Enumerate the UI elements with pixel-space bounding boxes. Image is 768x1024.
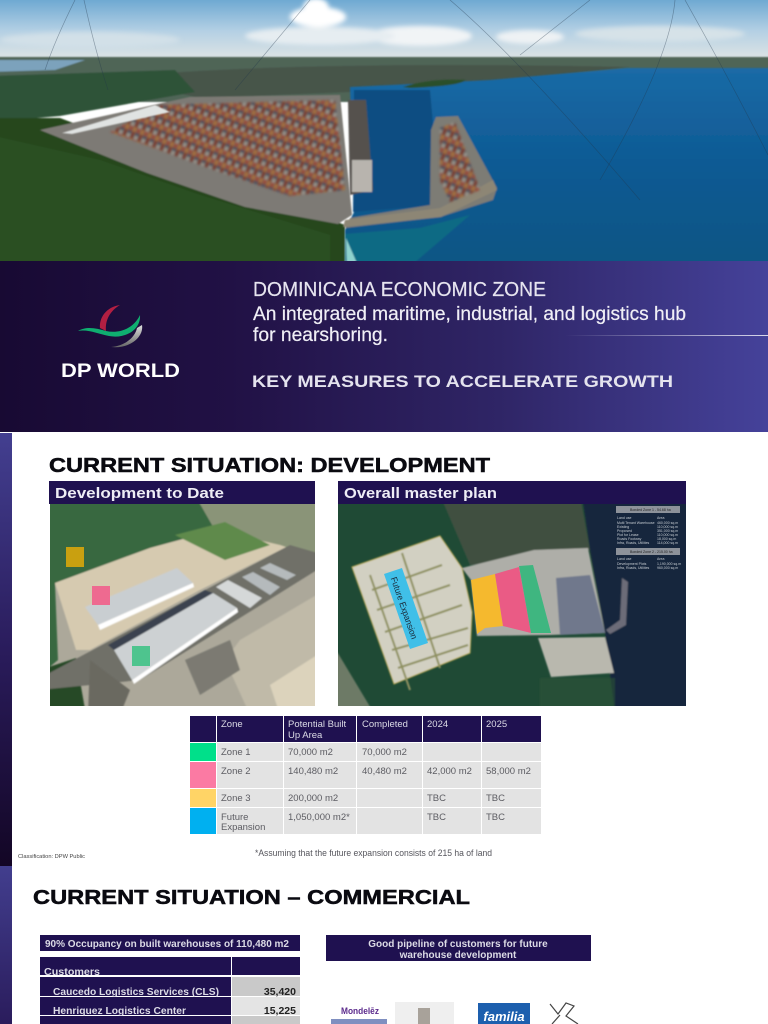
header row	[190, 716, 541, 742]
zone 3 area	[471, 574, 503, 634]
map legend: Area	[657, 516, 664, 520]
header row: 2025	[486, 719, 507, 730]
map legend: Bonded Zone 1 - 54.68 ha	[630, 508, 671, 512]
row: zone 3: 200,000 m2	[288, 793, 338, 804]
hero aerial photo of the port	[0, 0, 768, 275]
header row: 2024	[427, 719, 448, 730]
panel header	[49, 481, 315, 504]
header row: Completed	[362, 719, 408, 730]
heading: current situation commercial: CURRENT SITUATION – COMMERCIAL	[33, 887, 470, 909]
row: future expansion: Future	[221, 812, 248, 823]
row: zone 3: TBC	[486, 793, 505, 804]
row: customers header	[40, 957, 300, 978]
logo: bird nest emblem	[550, 1003, 578, 1024]
banner background	[0, 261, 768, 432]
table: zone build-out schedule	[190, 716, 541, 834]
banner subtitle: An integrated maritime, industrial, and logistics hub	[253, 304, 686, 325]
zone 1 area	[519, 565, 551, 633]
map legend: Existing	[617, 525, 629, 529]
row: zone 3	[190, 789, 541, 807]
map legend: Infra, Roads, Utilities	[617, 541, 650, 545]
row: zone 2: Zone 2	[221, 766, 251, 777]
row: CLS: 35,420	[264, 986, 296, 998]
row: Henriquez: 15,225	[264, 1005, 296, 1017]
logo: Mondelez: Mondelēz	[341, 1006, 379, 1016]
row: zone 1	[190, 743, 541, 761]
row: zone 2: 40,480 m2	[362, 766, 407, 777]
map legend: Roads Footway	[617, 537, 642, 541]
row: zone 3: Zone 3	[221, 793, 251, 804]
row: CLS: Caucedo Logistics Services (CLS)	[53, 986, 219, 998]
panel: pipeline header: warehouse development	[399, 950, 517, 961]
map legend: 114,000 sq.m	[657, 541, 678, 545]
map legend	[616, 506, 681, 570]
master plan map	[338, 504, 686, 706]
map legend: Proposed	[617, 529, 632, 533]
panel: development to date	[49, 481, 315, 706]
marker: zone 3	[66, 547, 84, 567]
map legend: Multi Tenant Warehouse	[617, 521, 655, 525]
row: next customer	[40, 1016, 300, 1024]
map legend: 351,000 sq.m	[657, 529, 678, 533]
map legend: Bonded Zone 2 - 215.00 ha	[630, 550, 673, 554]
logo: DP World	[61, 305, 180, 382]
row: future expansion: TBC	[486, 812, 505, 823]
panel: occupancy header: 90% Occupancy on built warehouses of 110,480 m2	[45, 938, 289, 950]
panel header: Overall master plan	[344, 485, 497, 502]
map legend: Land use	[617, 516, 631, 520]
row: Henriquez	[40, 997, 300, 1017]
classification label: Classification: DPW Public	[18, 854, 85, 860]
map legend: 460,000 sq.m	[657, 521, 678, 525]
zone 2 area	[495, 567, 531, 633]
row: customers header: Customers	[44, 966, 100, 978]
customer logos	[331, 1002, 578, 1024]
logo: Grupo Familia: familia	[483, 1009, 525, 1024]
logo wordmark: DP WORLD	[61, 361, 180, 382]
row: zone 3: TBC	[427, 793, 446, 804]
map legend: Area	[657, 557, 664, 561]
panel: pipeline header: Good pipeline of customers for future	[368, 939, 548, 950]
map legend: Land use	[617, 557, 631, 561]
row: zone 1: 70,000 m2	[288, 747, 333, 758]
panel: pipeline header	[326, 935, 591, 961]
row: future expansion: TBC	[427, 812, 446, 823]
map legend: 1,190,000 sq.m	[657, 562, 681, 566]
future expansion area	[384, 568, 428, 649]
row: future expansion: Expansion	[221, 822, 265, 833]
row: future expansion: 1,050,000 m2*	[288, 812, 350, 823]
banner key measures line: KEY MEASURES TO ACCELERATE GROWTH	[252, 372, 673, 391]
logo: Mondelez	[331, 1006, 387, 1024]
row: zone 2: 42,000 m2	[427, 766, 472, 777]
marker: zone 1	[132, 646, 150, 666]
aerial photo of warehouses	[50, 504, 315, 706]
panel: overall master plan	[330, 481, 696, 715]
row: zone 1: 70,000 m2	[362, 747, 407, 758]
future expansion area: Future Expansion	[389, 576, 419, 640]
left accent strip, commercial section	[0, 866, 12, 1024]
header row: Zone	[221, 719, 243, 730]
panel header: Development to Date	[55, 485, 224, 502]
map legend: Infra, Roads, Utilities	[617, 566, 650, 570]
map legend: 18,000 sq.m	[657, 537, 676, 541]
column dividers	[283, 743, 482, 834]
heading: current situation development: CURRENT SITUATION: DEVELOPMENT	[49, 455, 490, 477]
row: CLS	[40, 977, 300, 998]
icon: DP World swoosh	[78, 305, 142, 347]
map legend: 110,000 sq.m	[657, 525, 678, 529]
row: Henriquez: Henriquez Logistics Center	[53, 1005, 186, 1017]
row: zone 1: Zone 1	[221, 747, 251, 758]
map legend: Development Plots	[617, 562, 647, 566]
panel header	[338, 481, 686, 504]
logo: building photo	[395, 1002, 454, 1024]
banner subtitle: for nearshoring.	[253, 325, 388, 346]
footnote: *Assuming that the future expansion consists of 215 ha of land	[255, 848, 492, 859]
row: zone 2: 140,480 m2	[288, 766, 338, 777]
map legend: 960,000 sq.m	[657, 566, 678, 570]
map legend: 110,000 sq.m	[657, 533, 678, 537]
row: zone 2	[190, 762, 541, 788]
logo: Grupo Familia	[478, 1003, 530, 1024]
table: customers	[40, 957, 300, 1024]
header row: Potential Built	[288, 719, 346, 730]
row: zone 2: 58,000 m2	[486, 766, 531, 777]
header row: Up Area	[288, 730, 323, 741]
left accent strip, development section	[0, 433, 12, 866]
marker: zone 2	[92, 586, 110, 605]
map legend: Plot for Lease	[617, 533, 639, 537]
decorative rule	[565, 335, 768, 336]
row: future expansion	[190, 808, 541, 834]
banner heading: DOMINICANA ECONOMIC ZONE	[253, 279, 546, 301]
